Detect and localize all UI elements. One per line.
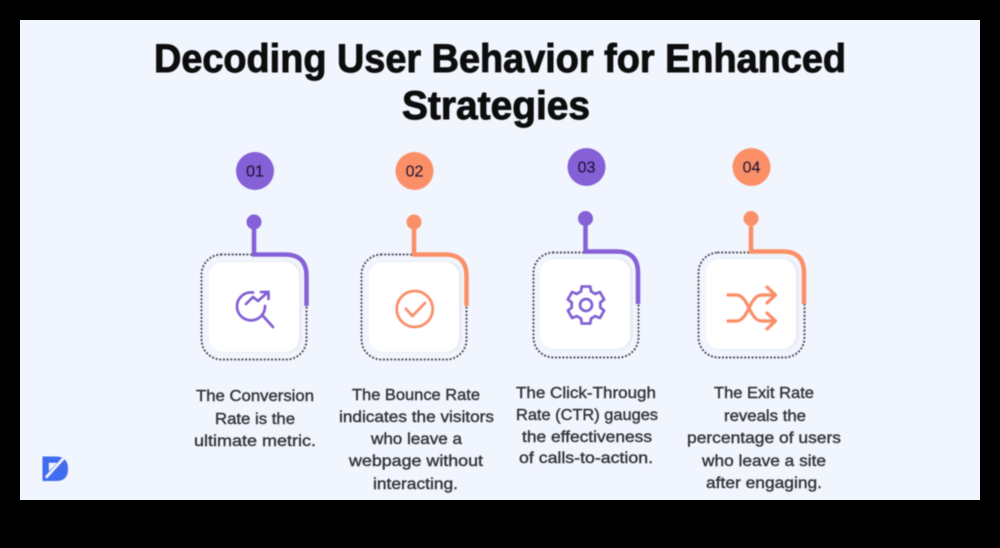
icon: shuffle arrows [728,287,776,329]
step 03: click-through rate [516,148,658,467]
text: bounce rate: who leave a [370,431,462,448]
text: conversion rate: The Conversion [196,388,314,405]
number badge 04 [732,148,770,186]
icon: gear [568,286,604,324]
card 01 [202,254,306,360]
text: conversion rate: Rate is the [215,411,295,428]
text: exit rate: percentage of users [687,430,841,447]
step 01: conversion rate [194,152,316,450]
number badge 04: 04 [743,160,760,176]
number badge 02 [396,152,434,190]
card 02 [362,254,466,360]
icon: brand logo [42,455,68,481]
number badge 03 [568,148,606,186]
step 02: bounce rate [339,152,494,493]
title: Strategies [402,84,590,128]
title: Decoding User Behavior for Enhanced [154,37,846,81]
connector 02 [406,214,466,306]
text: bounce rate [339,387,494,493]
icon: check circle [397,291,433,327]
number badge 01: 01 [246,164,264,180]
connector 01 [246,214,306,306]
text: bounce rate: interacting. [373,476,458,493]
text: click-through rate [516,385,658,467]
text: exit rate: The Exit Rate [714,385,814,402]
text: click-through rate: of calls-to-action. [519,450,653,467]
text: click-through rate: Rate (CTR) gauges [516,407,658,424]
text: bounce rate: indicates the visitors [339,409,494,426]
text: exit rate [687,385,841,492]
text: bounce rate: The Bounce Rate [352,387,480,404]
icon: magnifier with growth arrow [237,292,273,327]
infographic content [42,37,846,493]
text: click-through rate: The Click-Through [516,385,656,402]
text: exit rate: after engaging. [706,475,822,492]
text: exit rate: reveals the [724,408,806,425]
text: conversion rate: ultimate metric. [194,433,316,450]
number badge 02: 02 [406,164,424,180]
connector 03 [578,211,638,304]
text: exit rate: who leave a site [701,453,826,470]
title [154,37,846,128]
text: conversion rate [194,388,316,450]
step 04: exit rate [687,148,841,492]
number badge 03: 03 [578,160,596,176]
number badge 01 [236,152,274,190]
text: click-through rate: the effectiveness [522,429,652,446]
card 03 [534,252,638,358]
connector 04 [744,211,804,304]
card 04 [698,252,804,358]
text: bounce rate: webpage without [348,453,484,470]
